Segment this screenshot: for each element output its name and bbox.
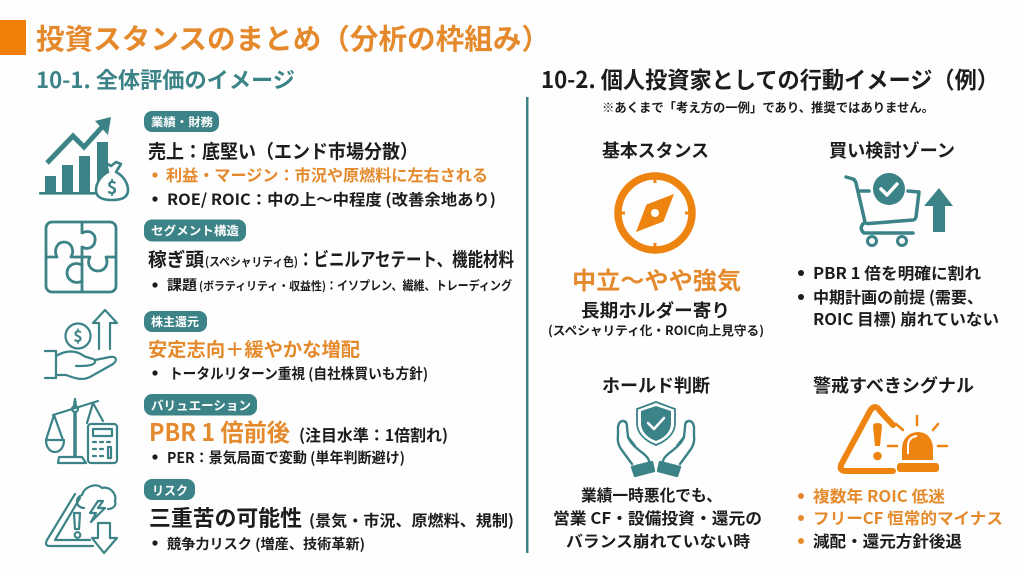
heading: basic stance: 基本スタンス xyxy=(602,137,709,163)
panel: basic stance xyxy=(548,137,764,339)
icon: warning triangle and siren xyxy=(841,407,947,472)
row: 株主還元 xyxy=(45,310,428,384)
bullet: issues xyxy=(152,275,512,295)
tag: 株主還元 xyxy=(144,311,207,332)
bullet: total return: トータルリターン重視 (自社株買いも方針) xyxy=(169,363,428,384)
bullets: warning signals: 複数年 ROIC 低迷 xyxy=(813,483,945,507)
icon: shield with hands xyxy=(618,402,694,476)
bullets: warning signals: 減配・還元方針後退 xyxy=(813,528,962,552)
icon: growth chart with money bag xyxy=(39,117,128,200)
tag: リスク xyxy=(144,479,195,500)
text: hold condition: バランス崩れていない時 xyxy=(566,528,750,552)
bullet: issues: 課題 xyxy=(167,275,197,295)
title bar: 投資スタンスのまとめ（分析の枠組み） xyxy=(36,17,550,58)
panel: warning signals xyxy=(798,372,1003,552)
panel: overall evaluation xyxy=(39,111,514,554)
heading: 10-1: 10-1. 全体評価のイメージ xyxy=(36,63,295,95)
text: sales: 売上：底堅い（エンド市場分散） xyxy=(148,137,418,164)
row: リスク xyxy=(46,479,514,554)
tag: バリュエーション: バリュエーション xyxy=(151,395,251,414)
text: top earners: 稼ぎ頭 xyxy=(148,245,204,272)
bullets: buy conditions: PBR 1 倍を明確に割れ xyxy=(813,260,981,284)
tag: セグメント構造: セグメント構造 xyxy=(151,222,239,239)
text: PBR xyxy=(149,413,448,448)
panel: buy zone xyxy=(798,137,999,330)
text: hold condition: 営業 CF・設備投資・還元の xyxy=(553,505,762,529)
icon: hand with coin and arrow: $ xyxy=(73,323,83,347)
text: stable dividend: 安定志向＋緩やかな増配 xyxy=(148,335,360,362)
row: 業績・財務 xyxy=(39,111,496,210)
bullets: warning signals xyxy=(798,483,1003,552)
icon: growth chart with money bag: $ xyxy=(107,174,117,200)
text: hold condition: 業績一時悪化でも、 xyxy=(581,482,722,506)
panel: hold decision xyxy=(553,372,762,552)
text: hold condition xyxy=(553,482,762,552)
note: ※あくまで「考え方の一例」であり、推奨ではありません。 xyxy=(602,97,934,116)
bullets: buy conditions: 中期計画の前提 (需要、 xyxy=(813,284,983,308)
tag: 株主還元: 株主還元 xyxy=(151,313,199,330)
panel divider xyxy=(526,97,528,553)
tag: リスク: リスク xyxy=(152,480,188,499)
bullets: buy conditions: ROIC 目標) 崩れていない xyxy=(813,306,999,330)
heading: warning signals: 警戒すべきシグナル xyxy=(813,372,974,398)
bullet: issues: ：イソプレン、繊維、トレーディング xyxy=(326,275,512,294)
bullets: warning signals: フリーCF 恒常的マイナス xyxy=(813,505,1003,529)
icon: scales and calculator xyxy=(46,399,117,463)
icon: puzzle xyxy=(46,222,116,292)
icon: risk triangle with storm and arrow xyxy=(46,485,117,553)
text: top earners: ：ビニルアセテート、機能材料 xyxy=(298,245,514,272)
bullet: PER: PER：景気局面で変動 (単年判断避け) xyxy=(167,447,405,468)
bullet: issues: (ボラティリティ・収益性) xyxy=(199,278,326,294)
tag: セグメント構造 xyxy=(144,220,246,242)
text: triple risk: (景気・市況、原燃料、規制) xyxy=(309,509,514,531)
text: triple risk xyxy=(149,501,514,533)
row: セグメント構造 xyxy=(46,220,514,295)
text: PBR: (注目水準：1倍割れ) xyxy=(299,422,448,446)
icon: compass xyxy=(618,176,692,250)
heading: 10-2: 10-2. 個人投資家としての行動イメージ（例） xyxy=(541,61,999,95)
text: long-term holder: 長期ホルダー寄り xyxy=(581,297,730,323)
tag: 業績・財務 xyxy=(144,111,219,132)
text: stance note: (スペシャリティ化・ROIC向上見守る) xyxy=(548,320,764,339)
row: バリュエーション xyxy=(46,394,448,468)
bullet: margin: 利益・マージン：市況や原燃料に左右される xyxy=(166,162,488,186)
text: PBR: PBR 1 倍前後 xyxy=(149,413,290,448)
text: top earners: (スペシャリティ色) xyxy=(205,253,298,270)
text: triple risk: 三重苦の可能性 xyxy=(149,501,302,533)
icon: hand with coin and arrow xyxy=(45,310,117,379)
bullet: ROE ROIC: ROE/ ROIC：中の上～中程度 (改善余地あり) xyxy=(167,188,496,210)
heading: buy zone: 買い検討ゾーン xyxy=(829,137,955,163)
bullet: competition: 競争力リスク (増産、技術革新) xyxy=(167,534,365,554)
text: neutral to bullish: 中立～やや強気 xyxy=(572,261,741,296)
bullets: buy conditions xyxy=(798,260,999,330)
icon: cart with check and arrow xyxy=(846,173,953,246)
tag: 業績・財務: 業績・財務 xyxy=(151,114,214,130)
heading: hold: ホールド判断 xyxy=(602,372,710,398)
